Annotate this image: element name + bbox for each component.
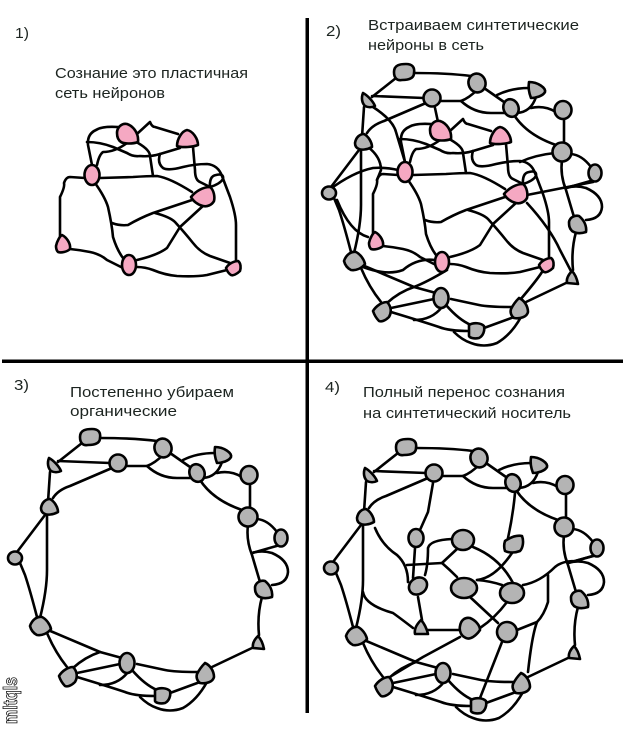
panel 3: organic neurons removed [1, 377, 288, 724]
heading panel 2: Встраиваем синтетические [368, 17, 579, 34]
step number 1: 1) [15, 25, 29, 42]
panel 4: full synthetic network [324, 379, 604, 720]
heading panel 3 line 2: органические [70, 403, 177, 420]
step number 4: 4) [325, 379, 340, 396]
diagram: pink neurons inside [369, 119, 554, 273]
diagram: grey neuron ring [322, 64, 602, 346]
divider: horizontal line [2, 360, 623, 363]
divider: vertical line [306, 18, 309, 713]
heading panel 4 line 2: на синтетический носитель [363, 405, 571, 422]
inner synthetic neurons [406, 529, 524, 642]
watermark: mltqls [1, 677, 22, 724]
panel 1: organic network [15, 25, 248, 276]
diagram: grey neuron ring [324, 439, 604, 720]
step number 2: 2) [326, 23, 341, 40]
inner synthetic connections [363, 483, 597, 698]
diagram: pink neurons [56, 122, 241, 276]
diagram: grey neuron ring [8, 429, 288, 710]
connections between grey and pink neurons [329, 107, 593, 300]
heading panel 1 line 2: сеть нейронов [55, 85, 165, 102]
heading panel 4: Полный перенос сознания [363, 384, 565, 401]
heading panel 2 line 2: нейроны в сеть [368, 37, 484, 54]
panel 2: synthetic neurons added [322, 17, 602, 346]
step number 3: 3) [14, 377, 29, 394]
heading panel 1: Сознание это пластичная [55, 65, 248, 82]
heading panel 3: Постепенно убираем [70, 384, 234, 401]
